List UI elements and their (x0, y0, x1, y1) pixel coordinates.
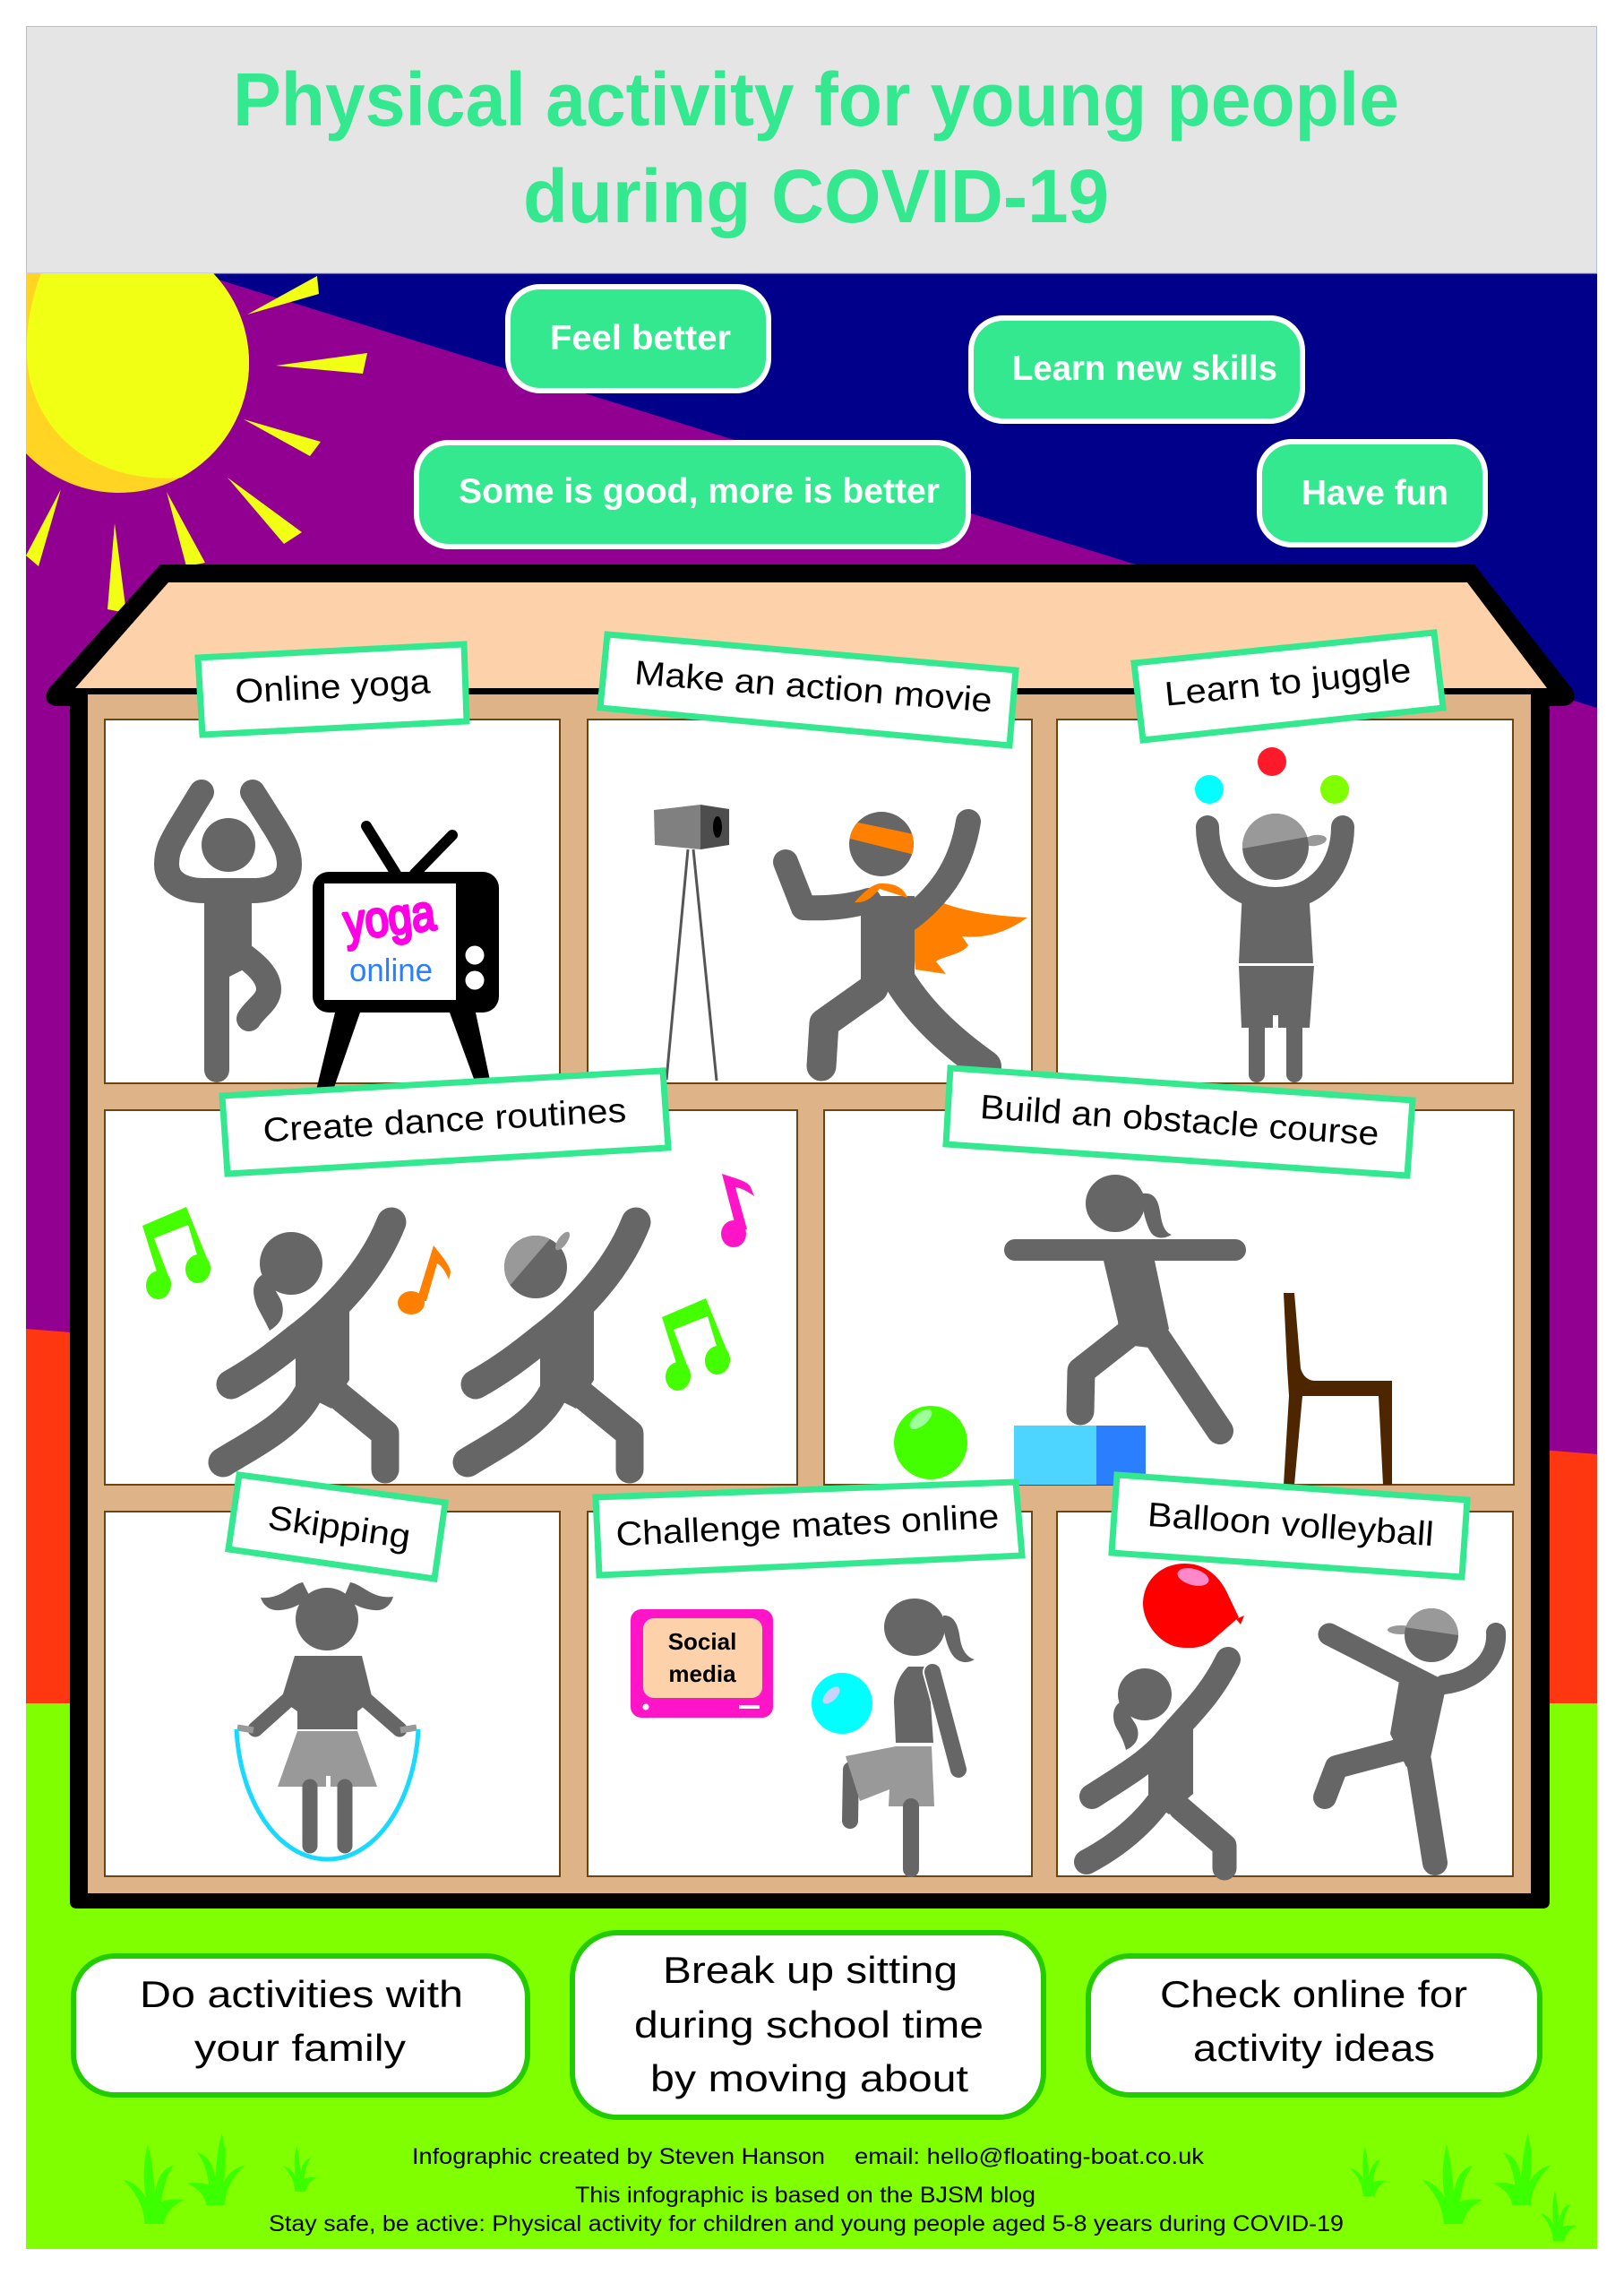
title banner (27, 27, 1596, 273)
figure: girl skipping (236, 1582, 418, 1859)
label: Challenge mates online: Challenge mates online (615, 1498, 1000, 1554)
icon: chair (1284, 1293, 1392, 1485)
icon: orange music note (398, 1245, 451, 1314)
callout: Some is good, more is better: Some is good, more is better (459, 472, 940, 511)
figure: balancing girl (1004, 1175, 1246, 1431)
figure: dancer with ponytail (223, 1222, 391, 1469)
label: Make an action movie: Make an action movie (633, 654, 993, 720)
panel: challenge mates (588, 1512, 1032, 1876)
label: Skipping: Skipping (266, 1499, 413, 1556)
callout: Do activities with your family (73, 1956, 528, 2095)
panel: action movie (588, 720, 1032, 1083)
icon: juggling balls (1195, 747, 1349, 804)
panel: online yoga (105, 720, 560, 1098)
title line 1: Physical activity for young people (233, 57, 1399, 142)
callout: Break up sitting: by moving about (650, 2057, 968, 2099)
callout: Learn new skills: Learn new skills (1012, 349, 1277, 388)
icon: camera on tripod (654, 805, 729, 1081)
icon: social media tablet: media (668, 1660, 736, 1687)
panel: dance routines (105, 1110, 797, 1485)
figure: girl kneeing ball (846, 1599, 975, 1869)
icon: grass tufts left (124, 2133, 317, 2224)
figure: boy juggling (1207, 811, 1343, 1074)
icon: television: yoga (340, 883, 439, 951)
icon: skipping rope (236, 1729, 418, 1859)
label: Online yoga (198, 644, 467, 735)
footer credits: This infographic is based on the BJSM blog (575, 2183, 1035, 2208)
label: Balloon volleyball (1112, 1475, 1467, 1577)
label: Challenge mates online (596, 1482, 1022, 1575)
footer credits (269, 2144, 1344, 2236)
footer credits: email: hello@floating-boat.co.uk (855, 2144, 1205, 2169)
label: Skipping (228, 1475, 445, 1579)
label: Create dance routines: Create dance routines (262, 1092, 627, 1150)
icon: blue box (1014, 1426, 1146, 1485)
label: Build an obstacle course: Build an obstacle course (979, 1089, 1380, 1153)
panel: balloon volleyball (1057, 1512, 1513, 1876)
callout: Have fun: Have fun (1302, 474, 1448, 513)
callout: Do activities with your family: Do activities with (140, 1973, 463, 2015)
label: Learn to juggle (1134, 633, 1443, 740)
icon: green music note right (662, 1298, 732, 1392)
footer credits: Infographic created by Steven Hanson (412, 2144, 825, 2169)
callout: Check online for activity ideas: activity ideas (1193, 2027, 1435, 2069)
footer credits: Stay safe, be active: Physical activity for children and young people aged 5-8 years during COVID-19 (269, 2211, 1344, 2236)
panel: skipping (105, 1512, 560, 1876)
figure: yoga pose (167, 792, 289, 1070)
house (46, 564, 1575, 1909)
icon: television: online (349, 952, 433, 988)
icon: pink music note (721, 1174, 754, 1247)
label: Online yoga: Online yoga (234, 663, 432, 711)
figure: superhero with cape (786, 812, 1027, 1066)
label: Build an obstacle course (946, 1068, 1413, 1176)
icon: red balloon (1143, 1564, 1244, 1648)
figure: girl hitting balloon (1087, 1659, 1228, 1868)
panel: juggling (1057, 720, 1513, 1083)
label: Create dance routines (222, 1071, 668, 1174)
icon: sun (26, 273, 367, 611)
callout: Do activities with your family: your family (194, 2027, 406, 2069)
icon: grass tufts right (1351, 2133, 1577, 2241)
label: Make an action movie (600, 634, 1016, 745)
callout: Feel better (508, 287, 769, 391)
callout: Learn new skills (971, 318, 1302, 421)
icon: cyan ball (812, 1673, 872, 1734)
callout: Break up sitting: Break up sitting (663, 1949, 958, 1991)
callout: Break up sitting (572, 1933, 1044, 2117)
icon: green music note (142, 1207, 212, 1301)
label: Learn to juggle: Learn to juggle (1163, 651, 1413, 714)
callout: Some is good, more is better (417, 443, 968, 547)
icon: green ball (894, 1406, 967, 1479)
panel: obstacle course (824, 1110, 1514, 1485)
figure: boy with cap (1325, 1604, 1496, 1863)
callout: Check online for activity ideas (1088, 1956, 1540, 2095)
label: Balloon volleyball: Balloon volleyball (1147, 1496, 1435, 1554)
figure: dancer with cap (468, 1222, 636, 1469)
callout: Check online for activity ideas: Check online for (1160, 1973, 1467, 2015)
icon: social media tablet (631, 1609, 773, 1718)
icon: social media tablet: Social (668, 1628, 736, 1655)
callout: Break up sitting: during school time (634, 2004, 984, 2046)
callout: Have fun (1259, 442, 1485, 545)
callout: Feel better: Feel better (550, 319, 731, 358)
icon: television (313, 826, 499, 1098)
title line 2: during COVID-19 (523, 154, 1109, 238)
